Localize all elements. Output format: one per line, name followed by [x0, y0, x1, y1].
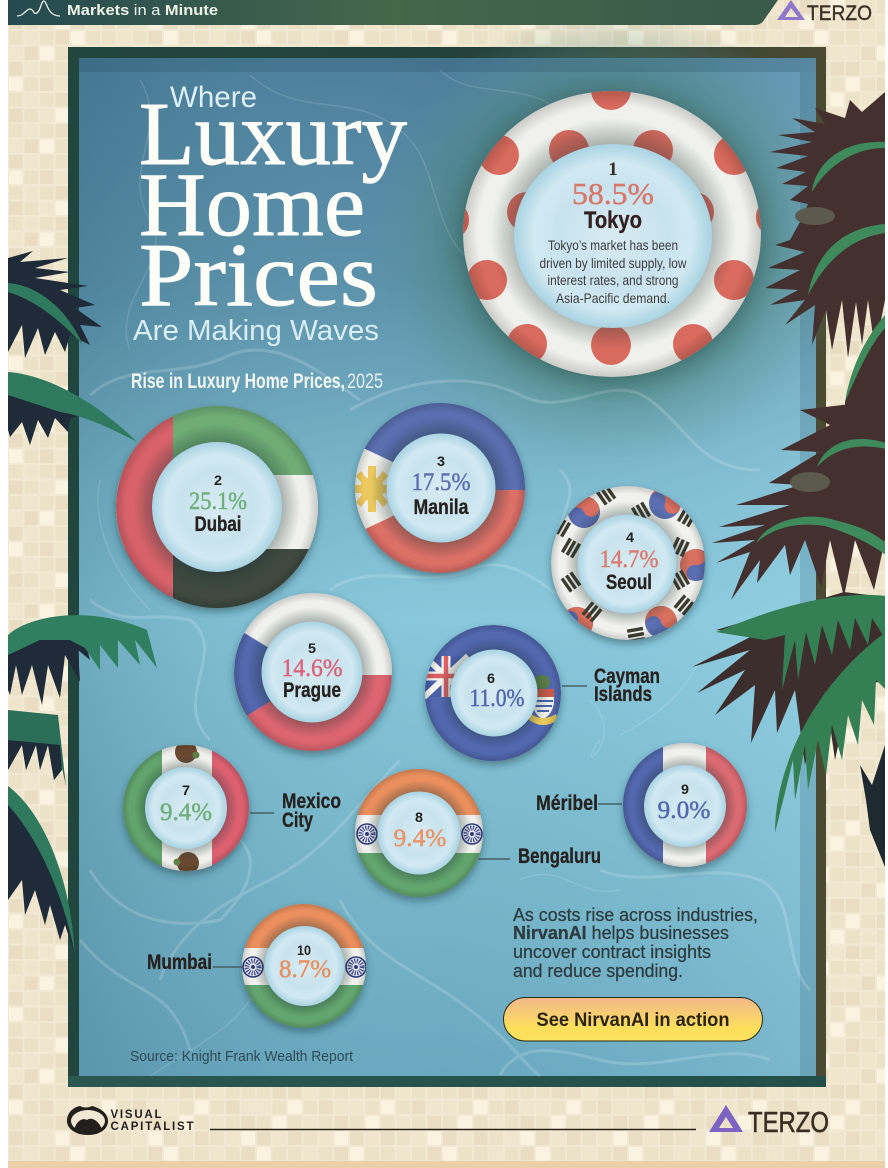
- footer rule: [210, 1128, 696, 1130]
- sponsor text: [513, 905, 758, 981]
- ring 6: Cayman Islands: 6: [487, 670, 495, 686]
- palm: lower left: [8, 615, 157, 955]
- rank: 1: [608, 159, 618, 180]
- label: Cayman Islands: Cayman: [594, 665, 660, 688]
- ring 2: Dubai: Dubai: [194, 513, 242, 536]
- ring 2: Dubai: 25.1%: [189, 488, 247, 515]
- ring 10: Mumbai: 8.7%: [279, 956, 331, 983]
- ring 3: Manila: 3: [437, 453, 445, 469]
- label: Bengaluru: [478, 845, 601, 868]
- ring 3: Manila: 17.5%: [412, 469, 470, 496]
- ring 9: Méribel: [620, 740, 751, 870]
- button: See NirvanAI in action: [536, 1010, 730, 1031]
- ring 6: Cayman Islands: [424, 625, 561, 761]
- ring 4: Seoul: 14.7%: [600, 546, 658, 573]
- ring 2: Dubai: [110, 400, 325, 615]
- palm: upper left: [8, 251, 137, 445]
- button: [504, 998, 762, 1041]
- label: Mexico City: Mexico: [282, 790, 341, 813]
- series title: Markets in a Minute: [67, 2, 218, 19]
- title: Prices: [139, 226, 378, 325]
- palm: lower right: [692, 592, 886, 833]
- ring 1: Tokyo: [449, 84, 774, 396]
- ring 8: Bengaluru: 8: [415, 809, 423, 825]
- title: Luxury: [139, 85, 407, 184]
- ring 4: Seoul: Seoul: [606, 571, 652, 594]
- sponsor text: uncover contract insights: [513, 942, 711, 962]
- ring 5: Prague: 14.6%: [282, 655, 342, 682]
- title: Home: [139, 156, 365, 255]
- footer logo: Visual Capitalist: CAPITALIST: [110, 1121, 194, 1133]
- label: Méribel: Méribel: [536, 792, 598, 815]
- description: Tokyo’s market has been: [548, 237, 678, 253]
- flag: union jack: [424, 656, 468, 697]
- ring 3: Manila: Manila: [414, 496, 469, 519]
- ring 9: Méribel: 9: [681, 781, 689, 797]
- ring 3: Manila: [340, 400, 530, 580]
- source: Source: Knight Frank Wealth Report: [130, 1048, 354, 1065]
- label: Cayman Islands: Islands: [594, 683, 652, 706]
- label: Bengaluru: Bengaluru: [518, 845, 601, 868]
- palm trees: [8, 92, 886, 955]
- label: Mexico City: City: [282, 809, 313, 832]
- ring 10: Mumbai: [240, 900, 370, 1033]
- ring 5: Prague: 5: [308, 640, 316, 656]
- header logo: Terzo: TERZO: [807, 2, 872, 25]
- description: interest rates, and strong: [548, 272, 678, 288]
- title: [133, 81, 407, 347]
- chart subtitle: 2025: [347, 370, 383, 393]
- description: driven by limited supply, low: [540, 255, 687, 271]
- sponsor text: As costs rise across industries,: [513, 905, 758, 925]
- ring 10: Mumbai: 10: [297, 942, 311, 958]
- palm: middle right: [712, 400, 886, 600]
- footer logo: Terzo: [709, 1105, 829, 1139]
- description: [540, 237, 687, 306]
- flag sun: [355, 466, 388, 512]
- ring 5: Prague: [225, 590, 395, 755]
- label: Cayman Islands: [562, 665, 660, 706]
- emblem: [175, 741, 199, 874]
- ring 4: Seoul: 4: [626, 529, 634, 545]
- ring 9: Méribel: 9.0%: [658, 797, 710, 824]
- title: Are Making Waves: [133, 315, 379, 347]
- label: Mumbai: Mumbai: [147, 951, 212, 974]
- value: 58.5%: [572, 176, 654, 211]
- city: Tokyo: [584, 207, 642, 234]
- chart subtitle: Rise in Luxury Home Prices,: [131, 370, 345, 393]
- ring 7: Mexico City: 9.4%: [160, 799, 212, 826]
- header logo: Terzo: [777, 0, 872, 25]
- ring 7: Mexico City: [120, 740, 254, 875]
- footer logo: Terzo: TERZO: [748, 1107, 829, 1139]
- title: Where: [170, 81, 257, 114]
- crest: [529, 675, 558, 725]
- ring 4: Seoul: [551, 482, 715, 645]
- ring 7: Mexico City: 7: [182, 782, 190, 798]
- pool water: [79, 10, 852, 1076]
- label: Mexico City: [250, 790, 341, 832]
- ring 8: Bengaluru: [350, 765, 490, 903]
- ring 8: Bengaluru: 9.4%: [394, 825, 446, 852]
- sponsor text: NirvanAI helps businesses: [513, 923, 729, 943]
- ring 6: Cayman Islands: 11.0%: [470, 685, 524, 712]
- description: Asia-Pacific demand.: [556, 290, 670, 306]
- icon: wave logo: [17, 1, 60, 16]
- sponsor text: and reduce spending.: [513, 961, 683, 981]
- footer logo: Visual Capitalist: [67, 1106, 194, 1135]
- palm: top right: [765, 92, 885, 410]
- pool frame: [68, 47, 826, 1087]
- header bar: [8, 0, 778, 25]
- ring 5: Prague: Prague: [283, 679, 341, 702]
- palm: bottom right: [860, 745, 885, 867]
- ring 2: Dubai: 2: [214, 472, 222, 488]
- footer logo: Visual Capitalist: VISUAL: [110, 1109, 162, 1121]
